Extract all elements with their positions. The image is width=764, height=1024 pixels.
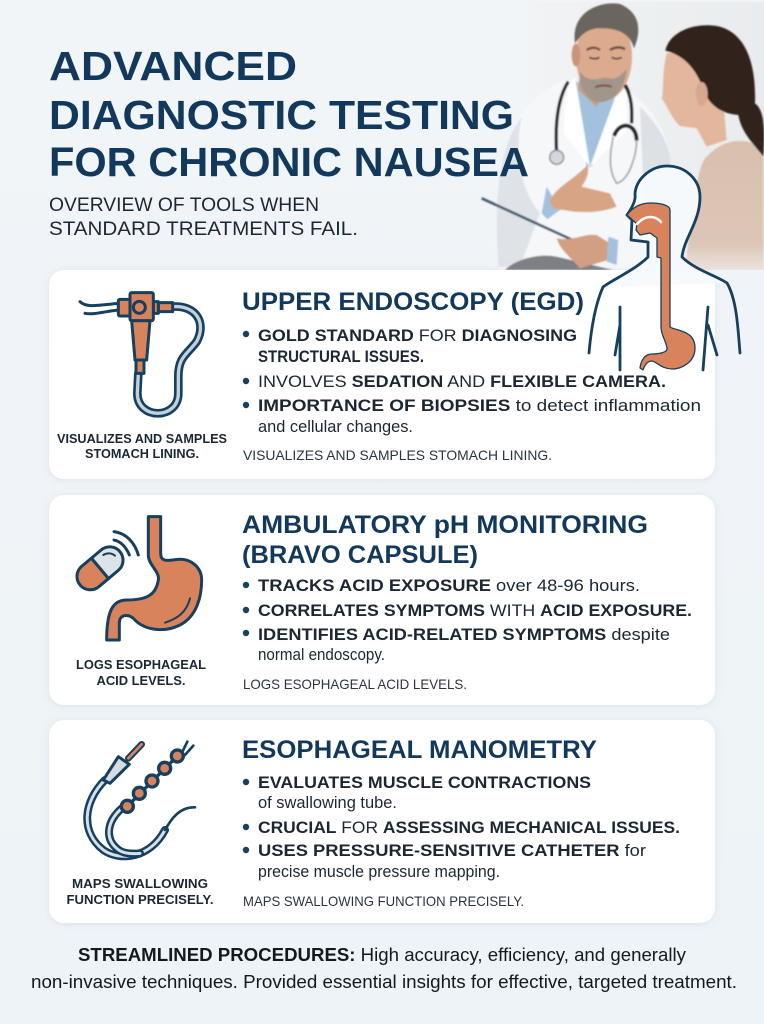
- panel: upper endoscopy: [49, 270, 715, 479]
- bullet list: TRACKS ACID EXPOSURE over 48-96 hours.: [258, 576, 640, 595]
- icon caption: [76, 658, 206, 688]
- icon: capsule and stomach: [72, 517, 202, 640]
- footer note: STREAMLINED PROCEDURES: High accuracy, efficiency, and generally: [78, 945, 686, 965]
- bullet list: CORRELATES SYMPTOMS WITH ACID EXPOSURE.: [258, 601, 692, 620]
- icon caption: ACID LEVELS.: [96, 674, 186, 688]
- heading: AMBULATORY pH MONITORING: [242, 511, 648, 539]
- title: FOR CHRONIC NAUSEA: [49, 139, 529, 185]
- bullet list: [243, 576, 692, 664]
- subtitle: STANDARD TREATMENTS FAIL.: [49, 219, 358, 240]
- heading: UPPER ENDOSCOPY (EGD): [242, 288, 584, 316]
- heading: ESOPHAGEAL MANOMETRY: [242, 736, 597, 764]
- heading: (BRAVO CAPSULE): [242, 541, 478, 569]
- footer note: non-invasive techniques. Provided essential insights for effective, targeted treatment.: [31, 972, 737, 992]
- photo: doctor and patient consultation: [480, 2, 764, 270]
- bullet list: STRUCTURAL ISSUES.: [258, 347, 424, 366]
- bullet list: [243, 326, 701, 436]
- bullet list: of swallowing tube.: [258, 793, 397, 812]
- panel: ambulatory pH monitoring: [49, 495, 715, 705]
- icon caption: [57, 432, 227, 461]
- bullet list: normal endoscopy.: [258, 645, 385, 664]
- icon caption: STOMACH LINING.: [85, 447, 199, 461]
- subtitle: OVERVIEW OF TOOLS WHEN: [49, 195, 319, 216]
- subtitle: [49, 195, 358, 240]
- icon caption: VISUALIZES AND SAMPLES: [57, 432, 227, 446]
- panel: esophageal manometry: [49, 720, 715, 923]
- summary line: VISUALIZES AND SAMPLES STOMACH LINING.: [243, 447, 552, 463]
- bullet list: CRUCIAL FOR ASSESSING MECHANICAL ISSUES.: [258, 818, 680, 837]
- summary line: MAPS SWALLOWING FUNCTION PRECISELY.: [243, 893, 524, 909]
- icon: manometry catheter: [87, 742, 195, 856]
- icon caption: MAPS SWALLOWING: [72, 877, 208, 891]
- icon caption: LOGS ESOPHAGEAL: [76, 658, 206, 672]
- summary line: LOGS ESOPHAGEAL ACID LEVELS.: [243, 676, 467, 692]
- bullet list: INVOLVES SEDATION AND FLEXIBLE CAMERA.: [258, 372, 666, 391]
- bullet list: IDENTIFIES ACID-RELATED SYMPTOMS despite: [258, 625, 670, 644]
- bullet list: precise muscle pressure mapping.: [258, 862, 500, 881]
- bullet list: EVALUATES MUSCLE CONTRACTIONS: [258, 773, 591, 792]
- title: [49, 43, 529, 185]
- bullet list: IMPORTANCE OF BIOPSIES to detect inflammation: [258, 396, 701, 415]
- bullet list: USES PRESSURE-SENSITIVE CATHETER for: [258, 841, 646, 860]
- icon: endoscope: [80, 293, 201, 413]
- icon: human digestive tract outline: [589, 166, 740, 370]
- icon caption: [66, 877, 214, 907]
- title: ADVANCED: [49, 43, 297, 89]
- icon caption: FUNCTION PRECISELY.: [66, 893, 214, 907]
- title: DIAGNOSTIC TESTING: [49, 92, 514, 138]
- bullet list: and cellular changes.: [258, 417, 413, 436]
- bullet list: GOLD STANDARD FOR DIAGNOSING: [258, 326, 577, 345]
- footer note: [31, 945, 737, 992]
- bullet list: [243, 773, 680, 881]
- heading: [242, 511, 648, 569]
